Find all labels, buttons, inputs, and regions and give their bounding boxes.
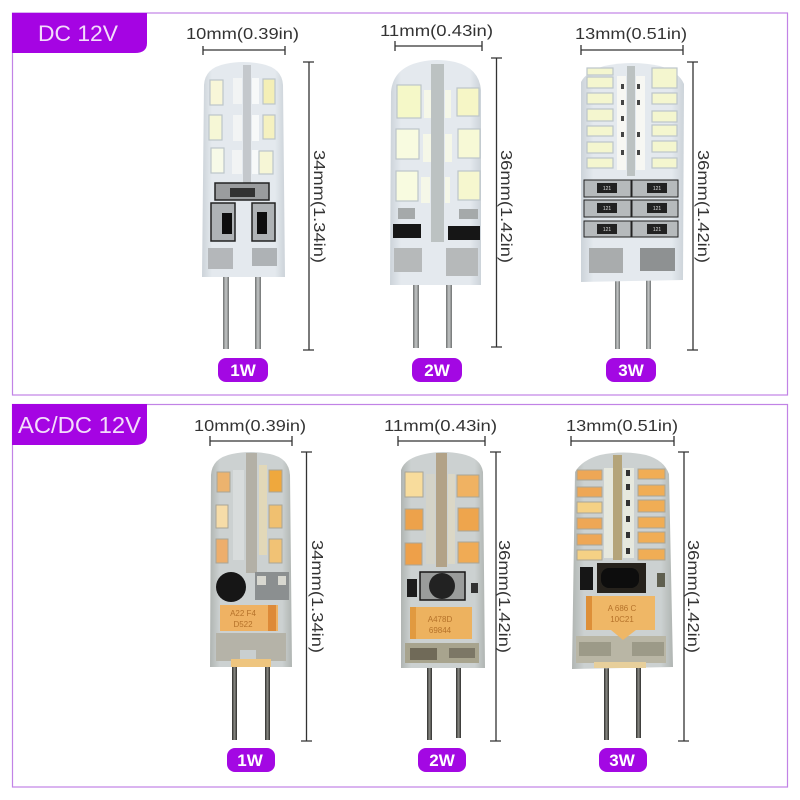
height dimension: 34mm: 34mm(1.34in) <box>308 540 325 653</box>
bulb: AC/DC 2W <box>401 452 485 740</box>
height dimension: 36mm <box>687 62 711 350</box>
bulb: AC/DC 3W: 10C21 <box>610 615 634 624</box>
label: 3W <box>599 748 647 772</box>
label: 1W <box>227 748 275 772</box>
label: 3W <box>606 358 656 382</box>
width dimension: 11mm <box>380 23 493 51</box>
height dimension: 34mm: 34mm(1.34in) <box>310 150 327 263</box>
tab: AC/DC 12V <box>12 404 147 445</box>
width dimension: 13mm <box>566 418 678 446</box>
label: 2W: 2W <box>424 361 451 380</box>
bulb: DC 3W <box>581 63 684 349</box>
tab: DC 12V: DC 12V <box>38 21 118 46</box>
label: 2W <box>412 358 462 382</box>
width dimension: 11mm <box>384 418 497 446</box>
panel frame <box>12 13 788 395</box>
height dimension: 36mm <box>678 452 701 741</box>
width dimension: 10mm: 10mm(0.39in) <box>194 418 306 435</box>
label: 2W: 2W <box>429 751 456 770</box>
bulb: AC/DC 1W: A22 F4 <box>230 609 256 618</box>
width dimension: 10mm: 10mm(0.39in) <box>186 26 299 43</box>
width dimension: 11mm: 11mm(0.43in) <box>384 418 497 435</box>
bulb: AC/DC 3W: A 686 C <box>608 604 636 613</box>
label: 1W: 1W <box>230 361 257 380</box>
height dimension: 36mm <box>491 58 514 347</box>
height dimension: 36mm: 36mm(1.42in) <box>694 150 711 263</box>
height dimension: 36mm: 36mm(1.42in) <box>495 540 512 653</box>
width dimension: 13mm: 13mm(0.51in) <box>566 418 678 435</box>
bulb: DC 2W <box>390 60 481 348</box>
label: 1W: 1W <box>237 751 264 770</box>
bulb: AC/DC 1W: D522 <box>233 620 253 629</box>
width dimension: 10mm <box>194 418 306 446</box>
height dimension: 36mm: 36mm(1.42in) <box>684 540 701 653</box>
bulb: DC 3W: 121 <box>653 206 661 212</box>
height dimension: 34mm <box>301 452 325 741</box>
bulb: DC 3W: 121 <box>653 227 661 233</box>
label: 1W <box>218 358 268 382</box>
bulb: AC/DC 1W <box>210 452 292 740</box>
panel: DC 12V <box>12 13 788 395</box>
width dimension: 13mm <box>575 26 687 55</box>
tab: DC 12V <box>12 13 147 53</box>
panel frame <box>12 404 788 787</box>
height dimension: 36mm: 36mm(1.42in) <box>497 150 514 263</box>
bulb: AC/DC 2W: 69844 <box>429 626 452 635</box>
bulb: AC/DC 2W: A478D <box>428 615 452 624</box>
height dimension: 34mm <box>303 62 327 350</box>
bulb: DC 3W: 121 <box>603 206 611 212</box>
panel: AC/DC 12V <box>12 404 788 787</box>
bulb: AC/DC 3W <box>572 452 673 740</box>
bulb: DC 3W: 121 <box>653 186 661 192</box>
label: 3W: 3W <box>618 361 645 380</box>
height dimension: 36mm <box>490 452 512 741</box>
width dimension: 13mm: 13mm(0.51in) <box>575 26 687 43</box>
bulb: DC 3W: 121 <box>603 227 611 233</box>
width dimension: 10mm <box>186 26 299 55</box>
bulb: DC 1W <box>202 62 285 349</box>
bulb: DC 3W: 121 <box>603 186 611 192</box>
label: 2W <box>418 748 466 772</box>
label: 3W: 3W <box>609 751 636 770</box>
width dimension: 11mm: 11mm(0.43in) <box>380 23 493 40</box>
tab: AC/DC 12V: AC/DC 12V <box>18 412 142 438</box>
